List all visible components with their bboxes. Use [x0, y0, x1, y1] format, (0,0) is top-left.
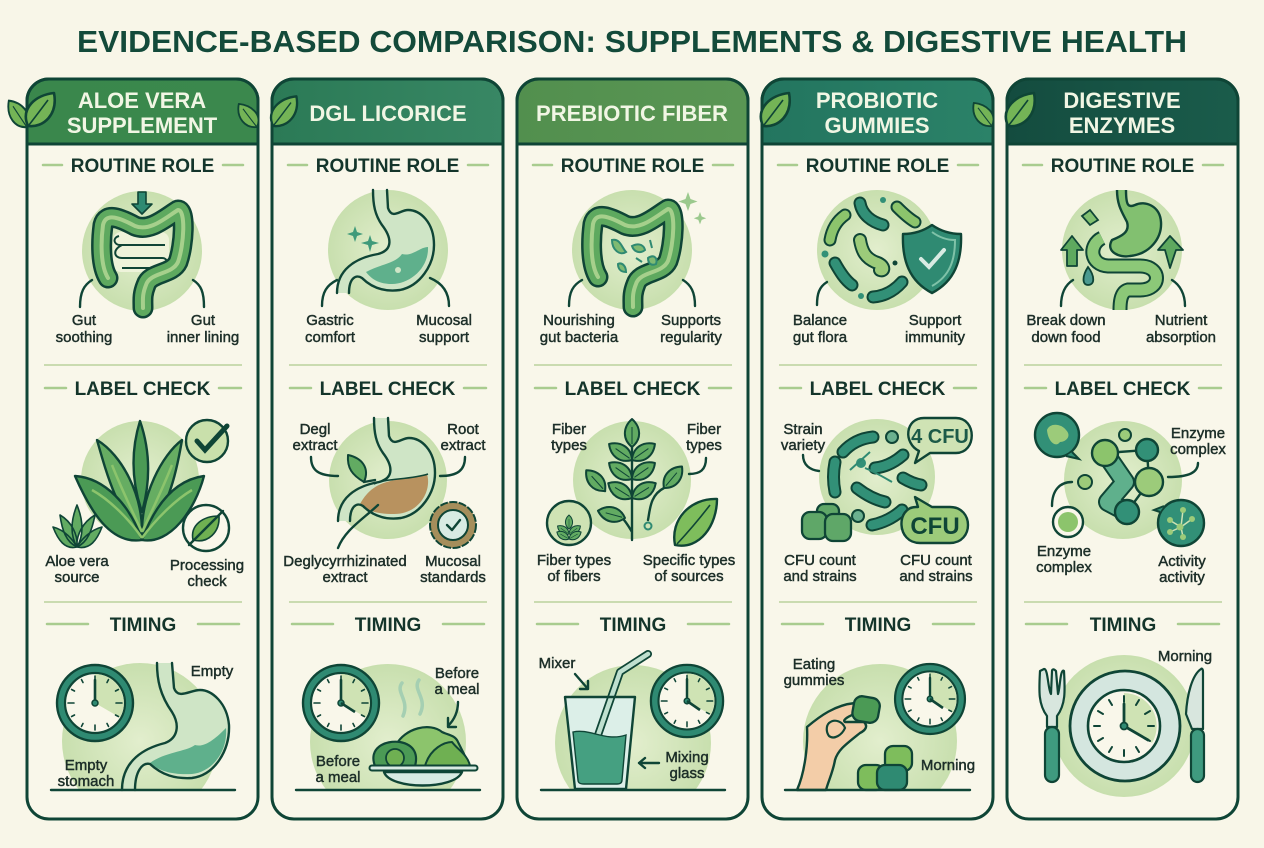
icon: colon	[80, 191, 204, 311]
labels: label check: Enzyme	[1171, 425, 1225, 442]
icon: colon with bacteria	[569, 190, 706, 310]
labels: label check: standards	[420, 569, 486, 586]
labels: label check: Specific types	[643, 552, 735, 569]
labels: label check: Processing	[170, 557, 244, 574]
header: probiotic gummies	[762, 79, 993, 144]
icon: large leaf	[674, 499, 717, 546]
labels: routine role: Gut	[191, 312, 216, 329]
labels: routine role: gut bacteria	[540, 329, 619, 346]
icon: header leaves	[8, 93, 258, 127]
heading: timing: TIMING	[110, 615, 176, 636]
labels: routine role: soothing	[56, 329, 112, 346]
icon: CFU bubble large	[901, 497, 968, 543]
labels: routine role: Supports	[661, 312, 721, 329]
icon: header leaf	[271, 96, 297, 126]
heading: label check: LABEL CHECK	[75, 379, 211, 400]
labels: routine role	[793, 312, 965, 346]
labels: label check: Fiber	[552, 421, 586, 438]
labels: label check	[45, 553, 244, 590]
heading: label check: LABEL CHECK	[1055, 379, 1191, 400]
labels: routine role: comfort	[305, 329, 356, 346]
labels: label check: variety	[781, 437, 826, 454]
labels: label check	[1036, 425, 1226, 586]
labels: routine role	[1026, 312, 1216, 346]
labels: label check: extract	[292, 437, 338, 454]
labels: routine role: gut flora	[793, 329, 848, 346]
labels: routine role: Support	[909, 312, 962, 329]
labels: label check: CFU count	[900, 552, 973, 569]
labels: routine role: Gastric	[306, 312, 354, 329]
header: DGL licorice: DGL LICORICE	[309, 101, 467, 126]
panel: probiotic gummies	[761, 79, 993, 819]
labels: timing	[784, 656, 975, 774]
labels: label check: of fibers	[547, 568, 601, 585]
labels: timing	[58, 663, 234, 790]
labels: timing: stomach	[58, 773, 114, 790]
labels: timing: a meal	[315, 769, 361, 786]
icon: plant badge	[547, 501, 591, 545]
labels: label check: of sources	[654, 568, 724, 585]
labels: routine role	[305, 312, 472, 346]
labels: routine role	[540, 312, 722, 346]
labels: routine role: inner lining	[167, 329, 239, 346]
header: aloe vera: ALOE VERA	[78, 88, 206, 113]
labels: timing	[315, 665, 480, 786]
labels: timing: Mixer	[539, 655, 575, 672]
labels: timing: a meal	[434, 681, 480, 698]
labels: label check: complex	[1036, 559, 1092, 576]
header: probiotic gummies: GUMMIES	[824, 113, 930, 138]
icon: hand, gummies, clock	[784, 662, 972, 792]
labels: timing: gummies	[784, 672, 844, 689]
heading: routine role: ROUTINE ROLE	[71, 156, 214, 177]
heading: timing: TIMING	[1090, 615, 1156, 636]
labels: label check: types	[686, 437, 722, 454]
header: DGL licorice	[272, 79, 503, 144]
icon: check badge	[186, 420, 228, 462]
labels: routine role	[56, 312, 239, 346]
heading: timing: TIMING	[600, 615, 666, 636]
header: digestive enzymes: DIGESTIVE	[1063, 88, 1181, 113]
icon: bubble with blob	[1035, 413, 1079, 459]
labels: routine role: Nutrient	[1155, 312, 1208, 329]
icon: digestive tract	[1061, 190, 1185, 310]
heading: timing: TIMING	[355, 615, 421, 636]
labels: routine role: Balance	[793, 312, 847, 329]
labels: timing: Empty	[191, 663, 234, 680]
labels: label check	[781, 421, 973, 585]
labels: routine role: Gut	[72, 312, 97, 329]
icon: glass and clock	[540, 650, 726, 792]
icon: bacteria	[817, 190, 937, 310]
labels: label check: CFU count	[784, 552, 857, 569]
heading: label check: LABEL CHECK	[320, 379, 456, 400]
labels: label check: complex	[1170, 441, 1226, 458]
header: aloe vera	[27, 79, 258, 144]
labels: routine role: support	[419, 329, 470, 346]
header: aloe vera: SUPPLEMENT	[67, 113, 218, 138]
panel: prebiotic fiber	[517, 79, 748, 821]
icon: clock and salad	[294, 664, 482, 792]
panel: digestive enzymes	[1006, 79, 1238, 819]
icon: aloe plant	[53, 421, 204, 548]
labels: label check: Aloe vera	[45, 553, 109, 570]
icon: standards badge	[430, 502, 476, 548]
labels: timing: Morning	[921, 757, 975, 774]
label: timing: Morning	[1158, 648, 1212, 665]
labels: label check: Enzyme	[1037, 543, 1091, 560]
labels: timing: Mixing	[665, 749, 709, 766]
labels: timing: glass	[669, 765, 705, 782]
labels: label check	[283, 421, 486, 586]
icon: activity bubble	[1154, 500, 1204, 546]
labels: label check: source	[54, 569, 100, 586]
labels: label check: Activity	[1158, 553, 1206, 570]
labels: label check: Fiber	[687, 421, 721, 438]
heading: label check: LABEL CHECK	[565, 379, 701, 400]
labels: label check: Root	[447, 421, 480, 438]
labels: label check: Mucosal	[425, 553, 481, 570]
heading: routine role: ROUTINE ROLE	[316, 156, 459, 177]
labels: label check: and strains	[783, 568, 857, 585]
header: digestive enzymes	[1007, 79, 1238, 144]
labels: routine role: immunity	[905, 329, 965, 346]
panel: DGL licorice	[271, 79, 503, 820]
labels: label check: Degl	[300, 421, 330, 438]
labels: routine role: Nourishing	[543, 312, 615, 329]
heading: label check: LABEL CHECK	[810, 379, 946, 400]
labels: timing	[539, 655, 709, 782]
heading: routine role: ROUTINE ROLE	[561, 156, 704, 177]
labels: routine role: regularity	[660, 329, 722, 346]
labels: routine role: down food	[1031, 329, 1101, 346]
header: prebiotic fiber: PREBIOTIC FIBER	[536, 101, 728, 126]
labels: label check: types	[551, 437, 587, 454]
header: prebiotic fiber	[517, 79, 748, 144]
heading: timing: TIMING	[845, 615, 911, 636]
title: EVIDENCE-BASED COMPARISON: SUPPLEMENTS & DIGESTIVE HEALTH	[77, 24, 1187, 59]
labels: label check: Deglycyrrhizinated	[283, 553, 407, 570]
labels: timing: Before	[316, 753, 360, 770]
icon: stomach with extract	[311, 418, 465, 548]
labels: label check: Fiber types	[537, 552, 611, 569]
header: digestive enzymes: ENZYMES	[1069, 113, 1175, 138]
labels: label check: activity	[1159, 569, 1205, 586]
icon: plate with clock, fork and knife	[1039, 655, 1204, 797]
heading: routine role: ROUTINE ROLE	[1051, 156, 1194, 177]
icon: processing check	[183, 505, 229, 551]
header: probiotic gummies: PROBIOTIC	[816, 88, 938, 113]
labels: timing: Eating	[793, 656, 835, 673]
icon: stomach	[322, 190, 449, 310]
labels: label check: extract	[322, 569, 368, 586]
icon: clock and stomach	[50, 662, 236, 792]
icon: header leaves	[761, 93, 993, 126]
icon: gummies	[802, 504, 851, 541]
labels: timing: Empty	[65, 757, 108, 774]
labels: label check: extract	[440, 437, 486, 454]
icon: enzyme orb	[1053, 507, 1083, 537]
icon: header leaf	[1006, 93, 1035, 126]
icon: enzyme complex	[1052, 421, 1198, 539]
labels: routine role: absorption	[1146, 329, 1216, 346]
icon: CFU bubble small	[908, 418, 972, 463]
icon: CFU bubble large: CFU	[910, 513, 960, 540]
labels: routine role: Break down	[1026, 312, 1106, 329]
labels: label check: Strain	[783, 421, 823, 438]
labels: label check: and strains	[899, 568, 973, 585]
heading: routine role: ROUTINE ROLE	[806, 156, 949, 177]
icon: fiber plant	[573, 419, 706, 540]
labels: routine role: Mucosal	[416, 312, 472, 329]
labels: label check	[537, 421, 735, 585]
labels: timing: Before	[435, 665, 479, 682]
icon: shield	[903, 225, 961, 293]
icon: CFU bubble small: 4 CFU	[911, 426, 969, 448]
panel: aloe vera supplement	[8, 79, 258, 819]
labels: label check: check	[187, 573, 227, 590]
icon: strain bacteria	[803, 419, 935, 535]
